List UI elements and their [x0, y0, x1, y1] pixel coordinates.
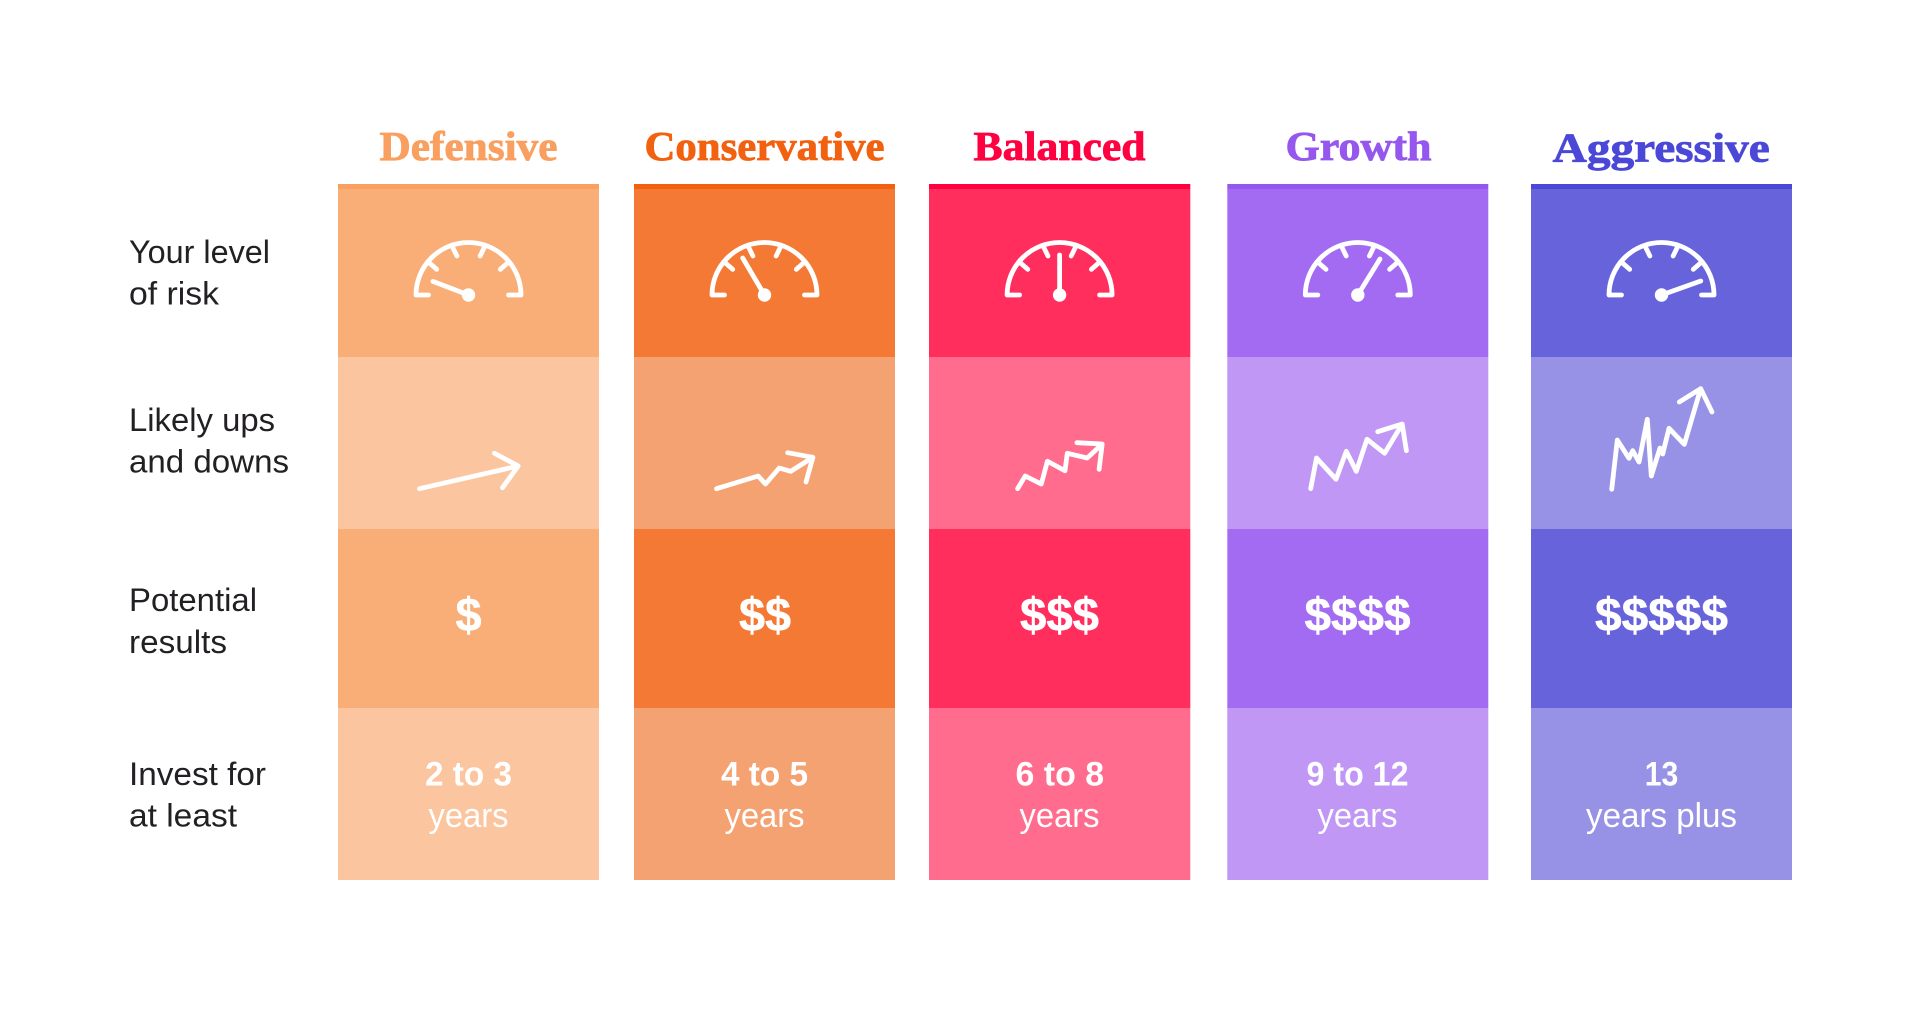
cell: results — [1531, 529, 1792, 708]
cell: ups and downs — [1531, 357, 1792, 529]
text: 13 years plus: 13 — [1645, 756, 1678, 794]
text: 9 to 12 years — [1306, 756, 1408, 835]
cell: results — [929, 529, 1190, 708]
text: 9 to 12 years: years — [1318, 797, 1398, 835]
heading: Growth: Growth — [1286, 123, 1432, 169]
text: 2 to 3 years: 2 to 3 — [425, 756, 512, 794]
label: your level of risk: of risk — [129, 276, 220, 312]
text: 6 to 8 years: years — [1020, 797, 1100, 835]
heading: Conservative: Conservative — [644, 123, 884, 169]
column: Aggressive — [1531, 125, 1792, 880]
icon: smooth rising arrow — [420, 453, 518, 489]
label: your level of risk: Your level — [129, 234, 270, 270]
cell: invest time — [338, 708, 599, 880]
label: potential results: results — [129, 624, 227, 660]
text: 4 to 5 years: 4 to 5 — [721, 756, 808, 794]
heading: Balanced: Balanced — [974, 123, 1146, 169]
text: two dollar signs: $$ — [739, 588, 791, 641]
label: potential results: Potential — [129, 582, 257, 618]
icon: gauge high needle — [1609, 242, 1714, 302]
label: likely ups and downs: and downs — [129, 444, 289, 480]
cell: risk — [1531, 189, 1792, 357]
column: Growth — [1227, 123, 1488, 880]
cell: invest time — [634, 708, 895, 880]
cell: invest time — [1531, 708, 1792, 880]
cell: invest time — [1227, 708, 1488, 880]
text: 13 years plus — [1586, 756, 1737, 835]
icon: gauge low needle — [416, 242, 521, 302]
label: your level of risk — [129, 234, 270, 312]
cell: results — [338, 529, 599, 708]
cell: results — [1227, 529, 1488, 708]
column: Balanced — [929, 123, 1190, 880]
icon: slightly bumpy rising arrow — [716, 453, 813, 489]
text: 9 to 12 years: 9 to 12 — [1306, 756, 1408, 794]
cell: invest time — [929, 708, 1190, 880]
icon: gauge mid-high needle — [1305, 242, 1410, 302]
cell: ups and downs — [338, 357, 599, 529]
row labels — [129, 234, 289, 834]
cell: ups and downs — [1227, 357, 1488, 529]
cell: risk — [338, 189, 599, 357]
column top bar — [1227, 184, 1488, 189]
label: likely ups and downs — [129, 402, 289, 480]
heading: Defensive: Defensive — [380, 123, 558, 169]
cell: risk — [929, 189, 1190, 357]
cell: risk — [1227, 189, 1488, 357]
icon: volatile rising arrow — [1311, 424, 1406, 489]
column top bar — [1531, 184, 1792, 189]
text: 13 years plus: years plus — [1586, 797, 1737, 835]
icon: highly volatile rising arrow — [1612, 389, 1712, 489]
heading: Aggressive: Aggressive — [1553, 125, 1770, 171]
text: 2 to 3 years: years — [428, 797, 508, 835]
cell: results — [634, 529, 895, 708]
icon: gauge low-mid needle — [712, 242, 817, 302]
column: Conservative — [634, 123, 895, 880]
text: 6 to 8 years — [1016, 756, 1104, 835]
label: potential results — [129, 582, 257, 660]
icon: zigzag rising arrow — [1018, 443, 1102, 489]
text: 4 to 5 years — [721, 756, 808, 835]
label: invest for at least — [129, 756, 266, 834]
icon: gauge mid needle — [1007, 242, 1112, 302]
text: five dollar signs: $$$$$ — [1595, 588, 1728, 641]
text: three dollar signs: $$$ — [1020, 588, 1099, 641]
cell: ups and downs — [634, 357, 895, 529]
label: invest for at least: Invest for — [129, 756, 266, 792]
column: Defensive — [338, 123, 599, 880]
column top bar — [338, 184, 599, 189]
column top bar — [634, 184, 895, 189]
cell: risk — [634, 189, 895, 357]
text: four dollar signs: $$$$ — [1304, 588, 1410, 641]
column top bar — [929, 184, 1190, 189]
label: invest for at least: at least — [129, 798, 237, 834]
text: 2 to 3 years — [425, 756, 512, 835]
text: 6 to 8 years: 6 to 8 — [1016, 756, 1104, 794]
label: likely ups and downs: Likely ups — [129, 402, 275, 438]
text: 4 to 5 years: years — [724, 797, 804, 835]
text: one dollar sign: $ — [456, 588, 482, 641]
cell: ups and downs — [929, 357, 1190, 529]
